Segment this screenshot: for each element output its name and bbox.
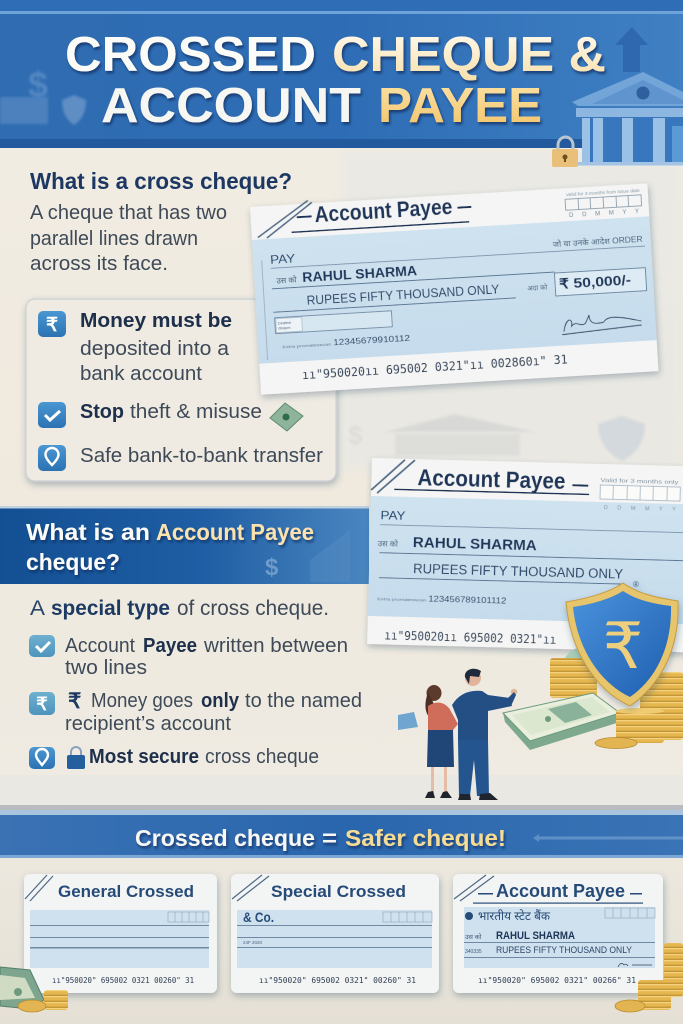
banner text: Safer cheque!: [345, 825, 506, 851]
title: [65, 28, 606, 133]
text: stop theft: theft & misuse: [130, 401, 262, 423]
illustration: man: [452, 669, 517, 800]
payee name: उस को: [378, 538, 399, 549]
date boxes: [565, 188, 642, 219]
text: account payee written: two lines: [65, 657, 147, 679]
text: money must be deposited: bank account: [80, 363, 202, 385]
crossing lines: [25, 875, 53, 901]
icon: bank with arrow: [572, 27, 683, 166]
MICR code: ıı"950020" 695002 0321 00260" 31: [52, 976, 194, 985]
text: account payee written: Account: [65, 635, 135, 657]
date boxes: D D M M Y Y: [569, 209, 639, 219]
date boxes: [600, 478, 681, 513]
account number: [377, 592, 507, 606]
cheque title: account payee: Account Payee: [314, 194, 453, 227]
text: account payee written: Payee: [143, 635, 197, 657]
card title: General Crossed: [58, 882, 194, 901]
icon: padlock: [552, 137, 578, 167]
bank logo and name: भारतीय स्टेट बैंक: [478, 909, 551, 923]
cash pile: [503, 693, 620, 750]
single coin: [595, 738, 637, 748]
small account box: [275, 311, 392, 334]
icon: rupee shield: ₹: [603, 610, 643, 684]
pay line: PAY: [270, 253, 296, 267]
cheque title: Account Payee: [417, 464, 566, 494]
text: stop theft: [80, 401, 262, 423]
heading text: cheque?: [26, 549, 120, 575]
icon: lock: [67, 747, 85, 769]
icon: check: [38, 402, 66, 428]
payee name: RAHUL SHARMA: [413, 535, 537, 554]
text: most secure: Most secure: [89, 746, 199, 768]
small account box: disapm: [278, 326, 291, 331]
illustration: bottom right coins: [615, 943, 683, 1012]
account number: 123456789101112: [428, 594, 507, 606]
banner text: [135, 825, 506, 851]
icon: check: [29, 635, 55, 657]
MICR code: ıı"950020" 695002 0321" 00260" 31: [259, 976, 416, 985]
text: most secure: [89, 746, 319, 768]
small account box: Deatest: [278, 321, 292, 326]
text: special type of cross cheque: special type: [51, 597, 170, 620]
banner text: =: [322, 825, 337, 851]
cheque: account payee large: [367, 458, 683, 652]
text: money goes only: Money goes: [91, 690, 193, 712]
payee and amount: [464, 930, 655, 967]
payee name: [378, 534, 683, 561]
text block: cross cheque definition: A cheque that has two: [30, 202, 227, 224]
title: PAYEE: [378, 79, 542, 133]
icon: rupee: ₹: [46, 315, 58, 336]
amount box: ₹ 50,000/-: [559, 272, 632, 292]
account number: 12345679910112: [333, 333, 411, 347]
text: money must be deposited: deposited into a: [80, 338, 230, 360]
date boxes: [605, 908, 655, 918]
title: ACCOUNT: [101, 79, 361, 133]
MICR code: ıı"950020" 695002 0321" 00266" 31: [478, 976, 636, 985]
cheque: account payee tilted: [250, 180, 658, 395]
amount in words: अदा को: [527, 283, 548, 293]
panel: account payee cheque: [453, 874, 663, 993]
text: money goes only: [65, 690, 362, 735]
panel: special crossed cheque: 24F 2020: [243, 940, 263, 945]
pay line: PAY: [380, 508, 406, 523]
crossing lines: [454, 875, 494, 901]
heading: what is a cross cheque: What is a cross cheque?: [30, 168, 292, 194]
coin stack front: [616, 708, 664, 743]
text: money goes only: ₹: [68, 690, 81, 713]
text block: cross cheque definition: across its face.: [30, 253, 168, 275]
text: money goes only: recipient’s account: [65, 713, 231, 735]
payee and amount: RUPEES FIFTY THOUSAND ONLY: [496, 945, 633, 956]
icon: rupee: [38, 311, 66, 337]
banner: account payee heading: $: [265, 554, 279, 581]
illustration: coins and cash: [503, 649, 683, 750]
text block: cross cheque definition: parallel lines drawn: [30, 228, 198, 250]
heading text: Account Payee: [156, 519, 314, 545]
text: money goes only: to the named: [245, 690, 362, 712]
faint background bank and shield: $: [348, 420, 363, 450]
and co label: & Co.: [243, 909, 274, 925]
text: special type of cross cheque: of cross cheque.: [177, 597, 329, 620]
crossing lines: [256, 200, 314, 239]
payee name: [271, 255, 554, 289]
coin stack back left: [550, 649, 597, 698]
icon: rupee: [29, 692, 55, 715]
panel: cross cheque benefits: [26, 299, 336, 481]
panel: general crossed cheque: [24, 874, 217, 993]
faint background bank and shield: [348, 414, 645, 461]
payee name: उस को: [276, 274, 298, 286]
heading text: [26, 519, 314, 575]
payee and amount: RAHUL SHARMA: [496, 930, 575, 942]
icon: rupee shield: ®: [633, 580, 639, 589]
account number: [282, 333, 411, 350]
icon: rupee shield: [566, 580, 678, 706]
date boxes: [383, 912, 432, 922]
crossing lines: [371, 459, 415, 494]
icon: faint dollar and shield: [0, 64, 86, 125]
text: special type of cross cheque: A: [30, 597, 45, 620]
text: money goes only: only: [201, 690, 240, 712]
account number: Extra promatesscan: [377, 596, 426, 602]
banner: account payee heading: [0, 506, 369, 584]
panel: special crossed cheque: [231, 874, 439, 993]
title: CHEQUE &: [332, 28, 606, 82]
illustration: small blue book: [398, 712, 418, 730]
text: special type of cross cheque: [30, 597, 329, 620]
text: money must be deposited: [80, 310, 232, 385]
payee and amount: 340335: [465, 949, 482, 955]
amount in words: RUPEES FIFTY THOUSAND ONLY: [306, 281, 500, 308]
amount in words: [272, 279, 548, 313]
date boxes: Valid for 3 months only: [600, 478, 679, 486]
account number: Extra promatesscan: [282, 341, 331, 349]
date boxes: [168, 912, 209, 922]
order label: जो या उनके आदेश ORDER: [552, 234, 643, 249]
text: stop theft: Stop: [80, 401, 124, 423]
pay line: [270, 233, 645, 269]
date boxes: D D M M Y Y: [604, 505, 676, 513]
text: account payee written: written between: [203, 635, 348, 657]
amount box: [554, 268, 647, 296]
icon: rupee: ₹: [36, 694, 48, 714]
icon: location pin: [38, 445, 66, 471]
banner text: Crossed cheque: [135, 825, 315, 851]
text block: cross cheque definition: [30, 202, 227, 275]
text: safe transfer: Safe bank-to-bank transfer: [80, 445, 323, 467]
heading text: What is an: [26, 519, 150, 545]
text: money must be deposited: Money must be: [80, 310, 232, 332]
card title: Account Payee: [496, 881, 625, 901]
icon: banknote: [270, 403, 303, 431]
illustration: bottom left cash and coins: [0, 967, 68, 1012]
illustration: woman: [425, 685, 458, 798]
payee name: RAHUL SHARMA: [302, 263, 418, 285]
pay line: [380, 508, 683, 533]
signature: [561, 312, 642, 335]
crossing lines: [232, 875, 269, 901]
icon: location pin: [29, 747, 55, 769]
text: most secure: cross cheque: [205, 746, 319, 768]
MICR code: ıı"950020ıı 695002 0321"ıı: [384, 628, 556, 647]
list: account payee points: [29, 635, 362, 769]
date boxes: Valid for 3 months from issue date: [566, 188, 640, 197]
MICR code: ıı"950020ıı 695002 0321"ıı 002860ı" 31: [302, 352, 568, 382]
text: account payee written: [65, 635, 348, 679]
payee and amount: उस को: [465, 933, 482, 941]
icon: faint dollar and shield: $: [28, 64, 48, 105]
banner: crossed cheque safer cheque: [0, 810, 683, 858]
amount in words: RUPEES FIFTY THOUSAND ONLY: [413, 561, 623, 582]
coin stack right: [640, 672, 683, 740]
header banner: [0, 0, 683, 167]
title: CROSSED: [65, 28, 316, 82]
card title: Special Crossed: [271, 882, 406, 901]
